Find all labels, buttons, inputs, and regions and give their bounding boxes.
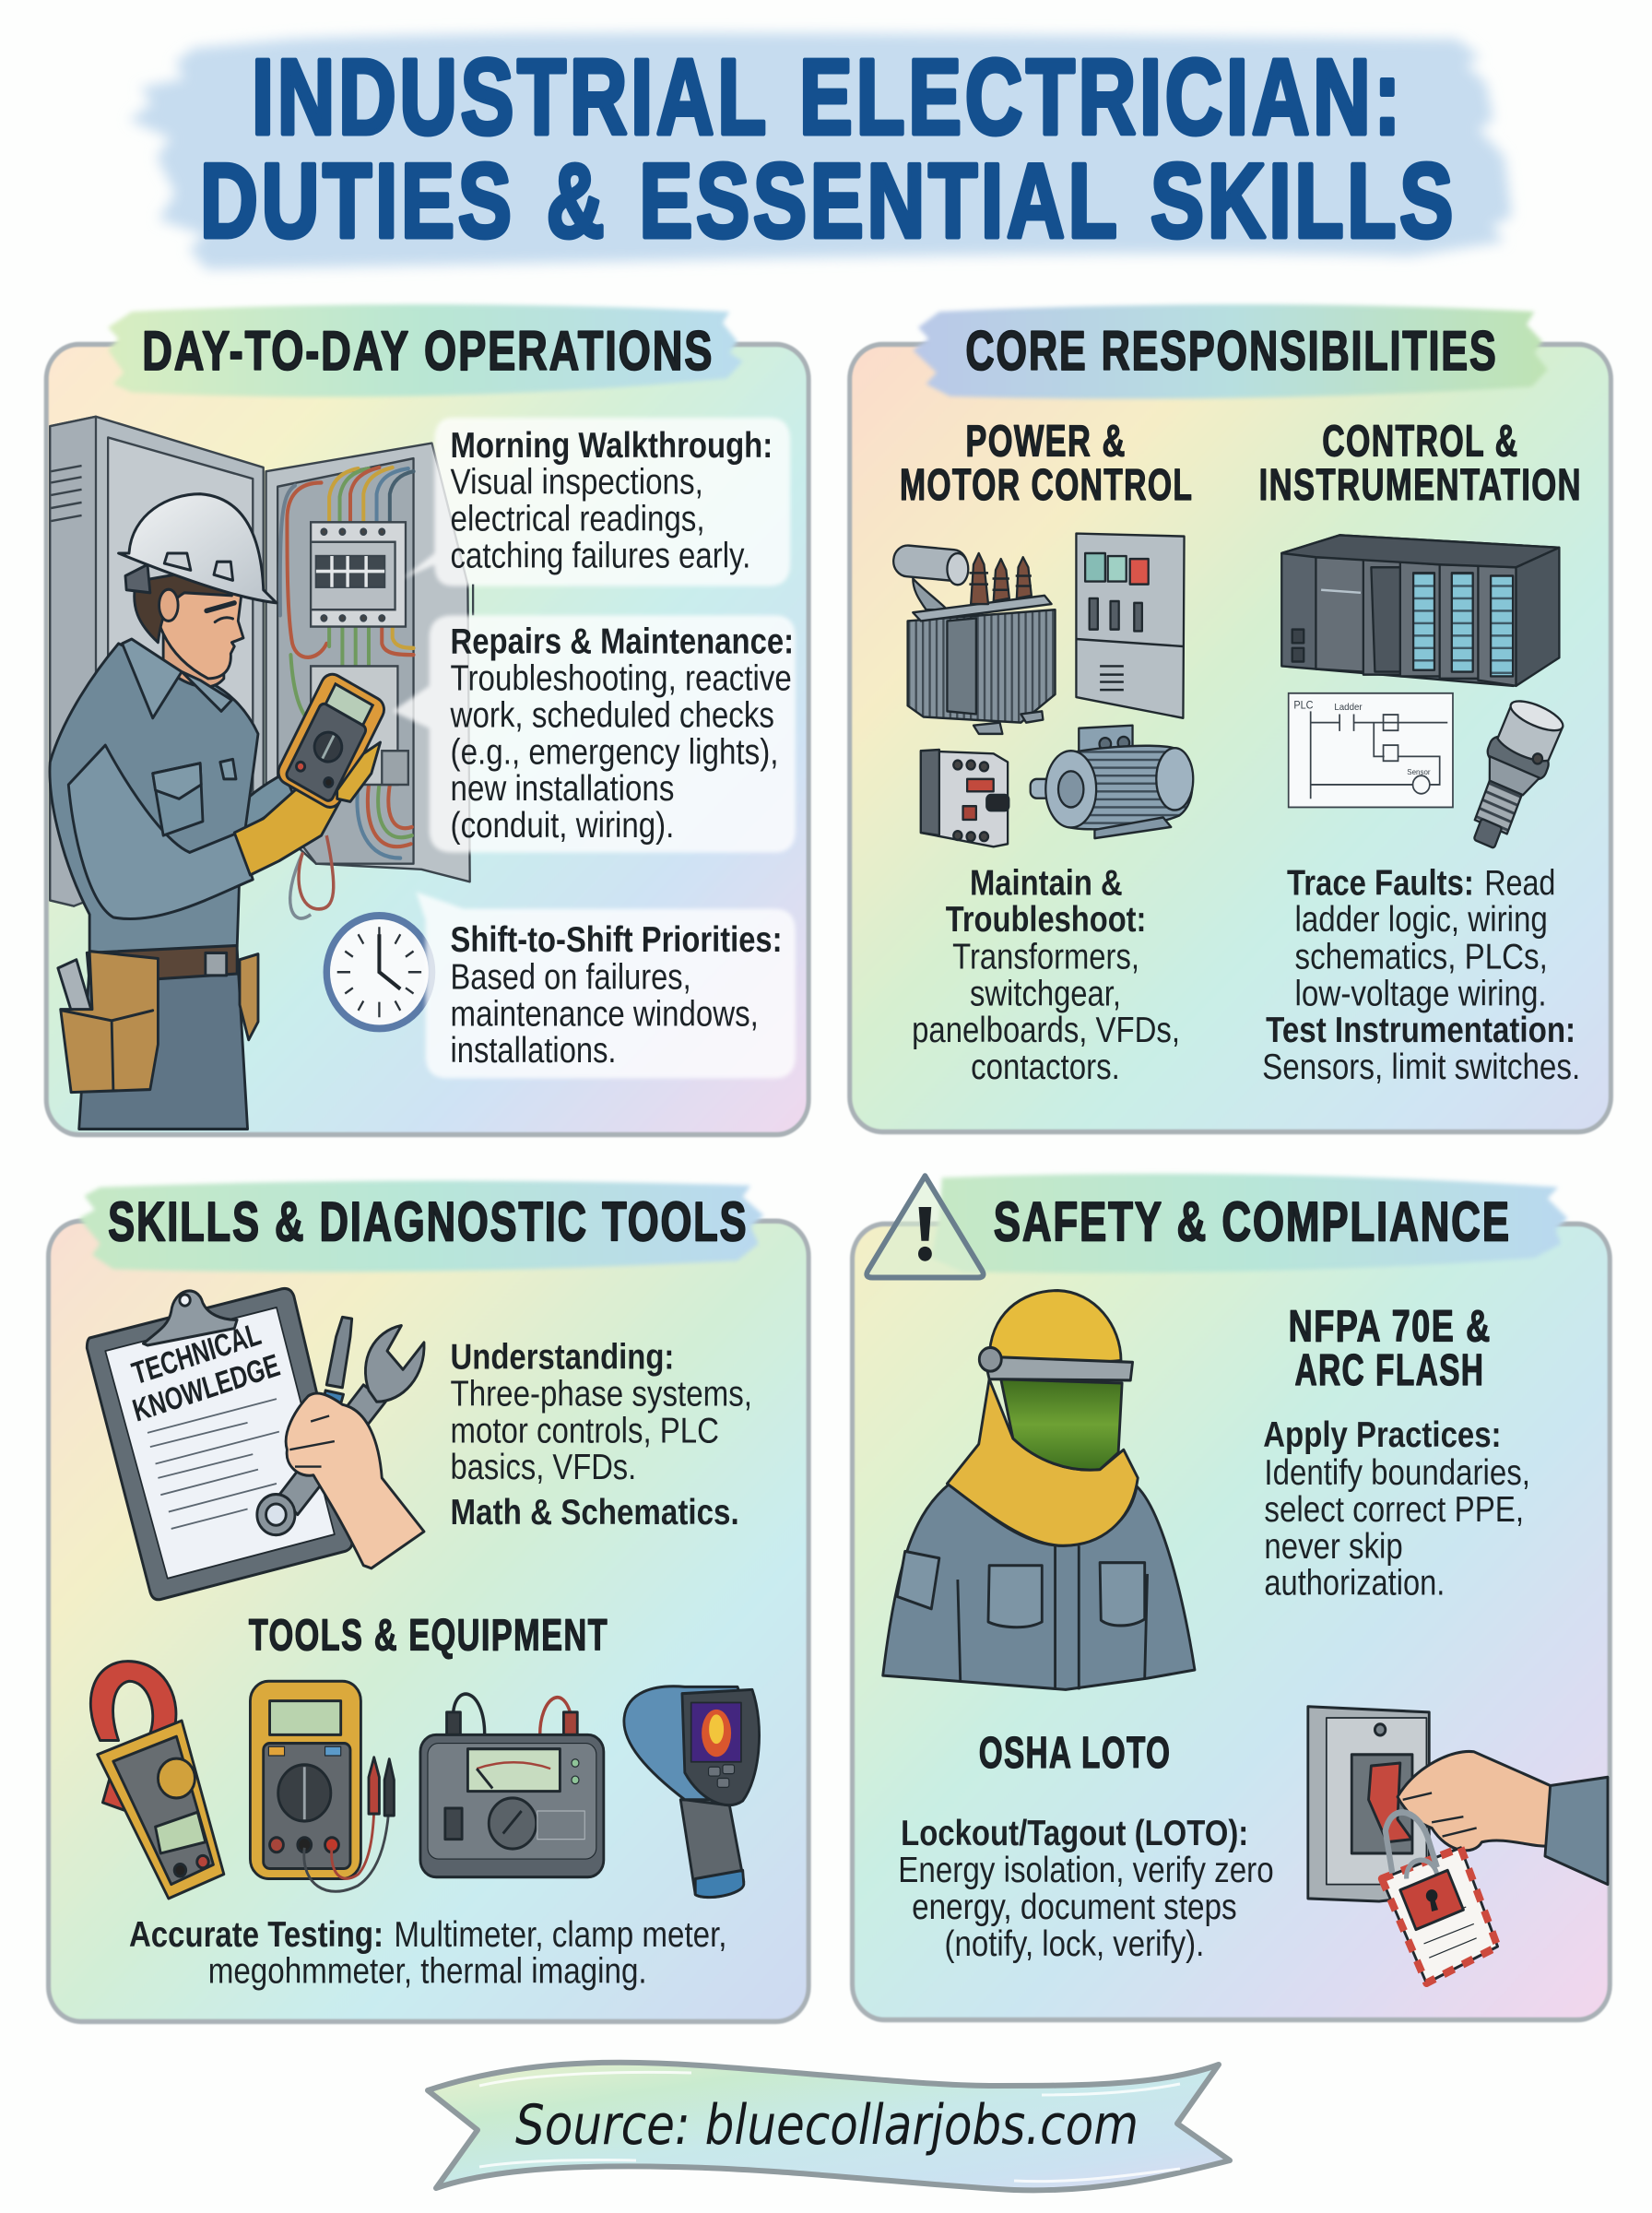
heading: day-to-day operations: DAY-TO-DAY OPERATIONS	[142, 320, 714, 382]
icon: clamp meter	[90, 1662, 224, 1899]
panel: skills and diagnostic tools	[49, 1180, 808, 2021]
subheading: tools and equipment: TOOLS & EQUIPMENT	[249, 1610, 608, 1660]
subheading: power and motor control	[900, 416, 1193, 509]
divider tick	[471, 585, 475, 615]
illustration: breaker unit	[311, 522, 408, 785]
text: understanding: motor controls, PLC	[451, 1410, 719, 1450]
text: trace faults and test instrumentation: ladder logic, wiring	[1295, 899, 1548, 939]
heading: core responsibilities: CORE RESPONSIBILITIES	[965, 320, 1498, 382]
text: understanding: Understanding:	[451, 1337, 674, 1377]
heading: safety and compliance	[931, 1174, 1568, 1272]
text: trace faults and test instrumentation: schematics, PLCs,	[1295, 936, 1548, 976]
text: trace faults and test instrumentation: Sensors, limit switches.	[1262, 1047, 1580, 1086]
illustration: handheld multimeter	[275, 670, 388, 811]
illustration: lockout switch with hand and tag	[1308, 1707, 1608, 1983]
text: maintain and troubleshoot: contactors.	[971, 1047, 1120, 1086]
ribbon highlights	[479, 2072, 1180, 2182]
icon: transformer	[892, 544, 1056, 734]
diagram: ladder logic: Ladder	[1334, 703, 1363, 713]
text: understanding: Three-phase systems,	[451, 1373, 752, 1414]
icon: megohmmeter	[420, 1694, 604, 1877]
callout bubble: morning walkthrough	[403, 418, 790, 586]
callout bubble: repairs and maintenance	[393, 615, 796, 852]
subheading: control and instrumentation: CONTROL &	[1322, 416, 1518, 466]
title text	[200, 37, 1457, 260]
panel background	[853, 1224, 1610, 2020]
text: lockout tagout: energy, document steps	[912, 1887, 1237, 1926]
heading: day-to-day operations	[108, 304, 743, 396]
illustration: test leads	[290, 835, 334, 918]
callout bubble: shift-to-shift priorities: Based on failures,	[451, 956, 691, 997]
illustration: clipboard	[87, 1288, 352, 1600]
panel: core responsibilities	[850, 304, 1611, 1131]
subheading: power and motor control: MOTOR CONTROL	[900, 459, 1193, 509]
text: trace faults and test instrumentation: low-voltage wiring.	[1295, 973, 1547, 1013]
illustration: gloved fingers	[337, 742, 381, 801]
footer ribbon	[428, 2063, 1230, 2190]
subheading: control and instrumentation	[1259, 416, 1582, 509]
diagram: ladder logic: PLC	[1293, 700, 1314, 711]
icon: warning triangle	[867, 1176, 984, 1278]
panel background	[850, 344, 1611, 1131]
text: maintain and troubleshoot: switchgear,	[970, 973, 1121, 1013]
panel: day-to-day operations	[46, 304, 808, 1135]
text: accurate testing	[129, 1914, 727, 1991]
callout bubble: shift-to-shift priorities: installations.	[451, 1030, 617, 1070]
heading: safety and compliance: SAFETY & COMPLIANCE	[994, 1191, 1511, 1253]
subheading: power and motor control: POWER &	[965, 416, 1127, 466]
text: maintain and troubleshoot: Transformers,	[952, 936, 1139, 976]
callout bubble: repairs and maintenance: Troubleshooting, reactive	[451, 658, 792, 698]
clipboard label: KNOWLEDGE	[129, 1348, 284, 1429]
clipboard label: TECHNICAL	[128, 1317, 265, 1392]
text: apply practices: Apply Practices:	[1263, 1414, 1502, 1454]
callout bubble: morning walkthrough: Morning Walkthrough:	[451, 425, 773, 465]
icon: thermal imaging camera	[624, 1686, 760, 1898]
heading: skills and diagnostic tools: SKILLS & DIAGNOSTIC TOOLS	[108, 1191, 748, 1253]
text: apply practices: never skip	[1264, 1526, 1403, 1566]
text: accurate testing: megohmmeter, thermal imaging.	[208, 1951, 647, 1991]
subheading: osha loto: OSHA LOTO	[979, 1727, 1171, 1777]
icon: sensor	[1457, 692, 1566, 857]
callout bubble: repairs and maintenance: (conduit, wiring).	[451, 805, 674, 845]
panel background	[49, 1221, 808, 2021]
diagram: ladder logic	[1289, 693, 1453, 807]
text: apply practices	[1263, 1414, 1530, 1603]
callout bubble: morning walkthrough: electrical readings,	[451, 498, 705, 538]
illustration: cabinet wires	[280, 467, 414, 858]
heading: skills and diagnostic tools	[79, 1180, 764, 1272]
callout bubble: shift-to-shift priorities	[416, 892, 796, 1078]
text: lockout tagout: Lockout/Tagout (LOTO):	[901, 1813, 1248, 1852]
text: lockout tagout: Energy isolation, verify zero	[898, 1850, 1274, 1889]
ribbon shape	[428, 2063, 1230, 2190]
title brush stroke	[129, 33, 1512, 269]
diagram: ladder logic: Sensor	[1407, 767, 1431, 776]
source text: Source: bluecollarjobs.com	[515, 2093, 1139, 2158]
text: maintain and troubleshoot: panelboards, VFDs,	[912, 1010, 1180, 1049]
text: accurate testing: Accurate Testing:	[129, 1914, 384, 1954]
text: maintain and troubleshoot: Maintain &	[970, 862, 1123, 903]
icon: switchgear	[1076, 534, 1185, 718]
text: trace faults and test instrumentation: Test Instrumentation:	[1266, 1010, 1575, 1049]
callout bubble: shift-to-shift priorities: maintenance windows,	[451, 993, 759, 1034]
heading: core responsibilities	[913, 304, 1548, 399]
subheading: nfpa 70e and arc flash: ARC FLASH	[1295, 1344, 1484, 1394]
callout bubble: shift-to-shift priorities: Shift-to-Shift Priorities:	[451, 919, 783, 959]
illustration: electrical cabinet	[50, 417, 470, 906]
subheading: nfpa 70e and arc flash	[1289, 1301, 1492, 1394]
text: lockout tagout: (notify, lock, verify).	[945, 1923, 1204, 1963]
panel background	[46, 344, 808, 1135]
text: trace faults and test instrumentation: Read	[1484, 862, 1555, 903]
callout bubble: morning walkthrough: Visual inspections,	[451, 462, 703, 502]
text: understanding: basics, VFDs.	[451, 1447, 636, 1486]
text: apply practices: authorization.	[1264, 1562, 1445, 1603]
callout bubble: repairs and maintenance: work, scheduled checks	[450, 694, 774, 735]
illustration: wall clock	[326, 916, 432, 1028]
callout bubble: repairs and maintenance: (e.g., emergency lights),	[451, 731, 779, 772]
text: maintain and troubleshoot	[912, 862, 1180, 1086]
callout bubble: morning walkthrough: catching failures early.	[451, 535, 750, 575]
text: apply practices: select correct PPE,	[1264, 1489, 1524, 1529]
title banner	[129, 33, 1512, 269]
icon: digital multimeter	[250, 1681, 394, 1891]
text: trace faults and test instrumentation	[1262, 862, 1580, 1086]
text: accurate testing: Multimeter, clamp meter,	[394, 1914, 727, 1954]
icon: motor starter	[921, 750, 1009, 846]
illustration: hand with wrench and screwdriver	[257, 1317, 424, 1568]
callout bubble: repairs and maintenance: new installations	[451, 768, 674, 808]
text: maintain and troubleshoot: Troubleshoot:	[946, 899, 1146, 939]
icon: electric motor	[1031, 726, 1193, 838]
text: understanding	[451, 1337, 752, 1532]
clipboard label	[119, 1314, 284, 1429]
text: lockout tagout	[898, 1813, 1274, 1963]
panel: safety and compliance	[853, 1174, 1610, 2020]
illustration: electrician	[50, 494, 340, 1129]
text: understanding: Math & Schematics.	[451, 1492, 739, 1532]
illustration: arc flash suit worker	[883, 1291, 1195, 1689]
text: trace faults and test instrumentation: Trace Faults:	[1287, 862, 1474, 903]
callout bubble: repairs and maintenance: Repairs & Maintenance:	[451, 621, 794, 661]
subheading: nfpa 70e and arc flash: NFPA 70E &	[1289, 1301, 1492, 1351]
text: apply practices: Identify boundaries,	[1264, 1452, 1530, 1492]
icon: PLC rack	[1281, 535, 1559, 686]
